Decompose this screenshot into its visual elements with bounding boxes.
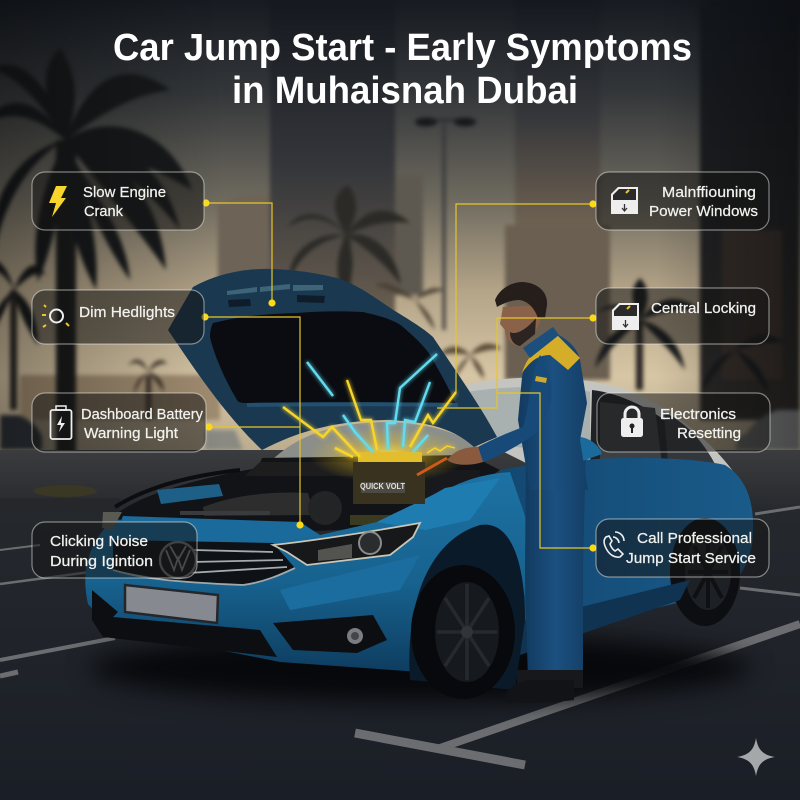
title: in Muhaisnah Dubai — [232, 70, 578, 112]
panel: call professional service: Call Professional — [637, 530, 752, 547]
icon: padlock — [621, 407, 643, 437]
jumper clamp — [417, 458, 447, 475]
arm — [478, 355, 551, 462]
panel: electronics resetting: Electronics — [660, 406, 736, 423]
yellow shoulders — [522, 333, 580, 373]
icon: car window — [611, 187, 638, 214]
mechanic in blue overalls — [447, 282, 602, 703]
panel: central locking: Central Locking — [651, 300, 756, 317]
lower intake — [92, 590, 277, 657]
electric bolts — [283, 354, 456, 457]
front body — [85, 472, 540, 672]
icon: car door — [612, 303, 639, 330]
panel: dashboard battery warning light: Dashboard Battery — [81, 406, 203, 423]
icon: lightning bolt — [49, 186, 67, 217]
panel: slow engine crank: Crank — [84, 203, 123, 220]
parking lines — [0, 507, 800, 765]
panel: malfunctioning power windows: Malnffiouning — [662, 184, 756, 201]
roof and side glass — [468, 378, 738, 480]
car: blue sedan with open hood — [85, 269, 753, 702]
engine bay — [112, 455, 500, 532]
panel: dashboard battery warning light: Warning Light — [84, 425, 179, 442]
title — [113, 27, 692, 112]
ground shadow — [90, 634, 750, 702]
open hood — [168, 269, 497, 450]
distant buildings — [20, 0, 800, 420]
panel: malfunctioning power windows — [596, 172, 769, 230]
rear wheel — [670, 518, 740, 626]
icon: sparkle watermark — [737, 738, 775, 776]
panel: dashboard battery warning light — [32, 393, 206, 452]
left headlight glow — [102, 512, 122, 530]
VW badge — [160, 542, 196, 578]
head — [495, 282, 547, 346]
side sill — [520, 580, 690, 655]
icon: dim sun — [42, 305, 69, 327]
boots — [505, 670, 583, 703]
grille with chrome bars — [113, 540, 295, 585]
headlight — [273, 523, 420, 565]
icon: phone — [604, 532, 624, 557]
panel: dim headlights: Dim Hedlights — [79, 304, 175, 321]
panel: slow engine crank — [32, 172, 204, 230]
panel: call professional service — [596, 519, 769, 577]
connector: dim headlights — [201, 313, 304, 529]
panel: malfunctioning power windows: Power Windows — [649, 203, 758, 220]
connector: central locking — [437, 314, 597, 408]
collar — [523, 327, 559, 358]
mirror — [580, 437, 602, 462]
panel: central locking — [596, 288, 769, 344]
battery: QUICK VOLT: QUICK VOLT — [360, 482, 405, 491]
fog light housing — [273, 615, 387, 653]
panel: clicking noise: Clicking Noise — [50, 533, 148, 550]
rear side panel — [470, 458, 753, 640]
wheel arch and front wheel — [409, 525, 525, 699]
connector: slow engine crank — [202, 199, 276, 307]
battery: QUICK VOLT — [353, 452, 425, 504]
small palms — [0, 185, 785, 420]
icon: battery — [50, 406, 72, 439]
panel: call professional service: Jump Start Service — [626, 550, 756, 567]
panel: electronics resetting — [597, 393, 770, 452]
background cars — [0, 415, 42, 450]
legs — [525, 440, 586, 682]
sleeve badge — [535, 376, 547, 383]
connector: power windows — [456, 200, 597, 392]
hand — [447, 447, 483, 465]
panel: slow engine crank: Slow Engine — [83, 184, 166, 201]
panel: clicking noise: During Igintion — [50, 553, 153, 570]
panel: electronics resetting: Resetting — [677, 425, 741, 442]
connector lines — [201, 199, 597, 552]
street lamp — [415, 118, 476, 330]
panel: clicking noise — [32, 522, 197, 578]
windshield under hood — [255, 422, 486, 475]
torso — [518, 333, 588, 490]
title: Car Jump Start - Early Symptoms — [113, 27, 692, 69]
connector: call service — [497, 393, 597, 552]
hood lip — [113, 516, 320, 543]
connector: dashboard battery — [205, 423, 300, 431]
large palm left — [0, 48, 192, 490]
license plate — [125, 585, 218, 623]
panel: dim headlights — [32, 290, 204, 344]
battery with jump start sparks — [283, 354, 468, 504]
